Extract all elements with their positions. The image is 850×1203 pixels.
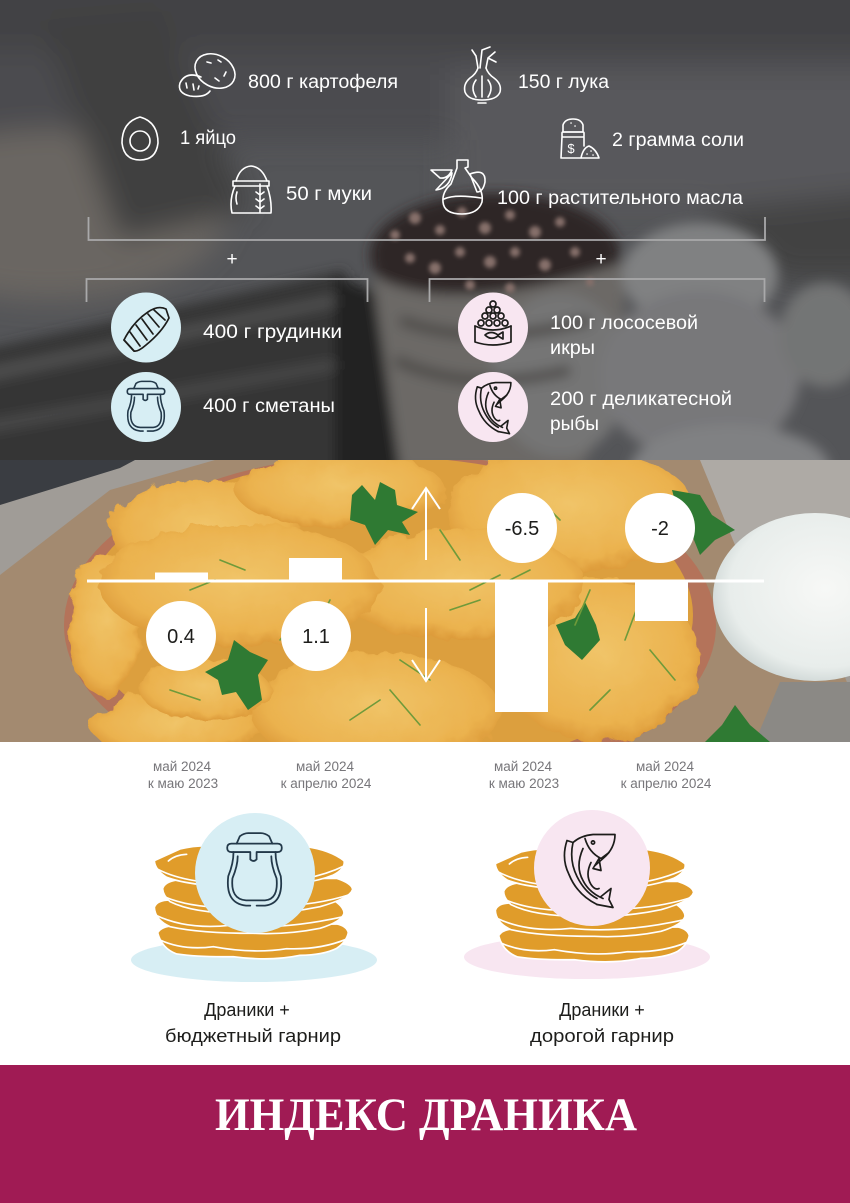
pancakes bbox=[495, 849, 694, 962]
icon: fish bbox=[564, 834, 615, 908]
food photo of potato pancakes bbox=[0, 460, 850, 742]
label: roe amount: икры bbox=[550, 338, 595, 359]
plus: expensive side: + bbox=[595, 249, 607, 270]
value: -6.5: -6.5 bbox=[505, 518, 539, 540]
value: -6.5 bbox=[487, 493, 557, 563]
icon: brisket circle bbox=[111, 292, 181, 362]
bar: -2 bbox=[635, 581, 688, 621]
ingredient: potatoes bbox=[179, 47, 398, 96]
icon: roe circle bbox=[458, 292, 528, 362]
topping: salmon roe bbox=[458, 292, 698, 362]
period label 3: май 2024 bbox=[494, 759, 553, 774]
topping: sour cream bbox=[111, 372, 335, 442]
icon: fish circle bbox=[458, 372, 528, 442]
pancakes bbox=[154, 846, 353, 959]
label: egg amount: 1 яйцо bbox=[180, 128, 236, 149]
icon: fish bbox=[476, 383, 511, 434]
value: 1.1 bbox=[281, 601, 351, 671]
bar: 1.1 bbox=[289, 558, 342, 581]
title band bbox=[0, 1065, 850, 1203]
bracket: budget toppings bbox=[86, 279, 368, 302]
label: roe amount: 100 г лососевой bbox=[550, 313, 698, 334]
bar chart: price index change bbox=[87, 488, 764, 712]
icon: sour cream circle bbox=[111, 372, 181, 442]
icon: flour sack bbox=[231, 166, 271, 213]
period label 2: к апрелю 2024 bbox=[281, 776, 372, 791]
bar: -6.5 bbox=[495, 581, 548, 712]
ingredient: egg bbox=[122, 117, 236, 160]
caption: expensive garnish: дорогой гарнир bbox=[530, 1026, 674, 1046]
arrow: down bbox=[412, 608, 440, 681]
bracket: base ingredients bbox=[88, 217, 765, 240]
icon: potatoes bbox=[179, 47, 241, 96]
value: 1.1: 1.1 bbox=[302, 626, 330, 648]
badge circle bbox=[534, 810, 650, 926]
icon: roe tin bbox=[475, 301, 511, 345]
icon: egg bbox=[122, 117, 158, 160]
period label 2: май 2024 bbox=[296, 759, 355, 774]
ingredient: oil bbox=[431, 160, 743, 214]
label: potatoes amount: 800 г картофеля bbox=[248, 72, 398, 93]
arrow: up bbox=[412, 488, 440, 560]
bracket: expensive toppings bbox=[430, 279, 764, 302]
plate shadow bbox=[131, 938, 377, 982]
caption: expensive garnish: Драники + bbox=[559, 1000, 645, 1020]
label: salt amount: 2 грамма соли bbox=[612, 130, 744, 151]
ingredient: salt bbox=[561, 119, 744, 158]
badge circle bbox=[195, 813, 315, 933]
label: flour amount: 50 г муки bbox=[286, 184, 372, 205]
icon: jar bbox=[227, 833, 282, 906]
label: fish amount: 200 г деликатесной bbox=[550, 389, 732, 410]
value: 0.4 bbox=[146, 601, 216, 671]
value: -2 bbox=[625, 493, 695, 563]
icon: salt shaker bbox=[561, 119, 599, 158]
period labels bbox=[148, 759, 712, 791]
period label 1: к маю 2023 bbox=[148, 776, 218, 791]
period label 3: к маю 2023 bbox=[489, 776, 559, 791]
label: oil amount: 100 г растительного масла bbox=[497, 188, 743, 209]
title: ИНДЕКС ДРАНИКА bbox=[215, 1089, 637, 1141]
caption: budget garnish: бюджетный гарнир bbox=[165, 1026, 341, 1046]
icon: sour cream jar bbox=[127, 381, 165, 431]
icon: oil bottle bbox=[431, 160, 485, 214]
label: onion amount: 150 г лука bbox=[518, 72, 609, 93]
period label 1: май 2024 bbox=[153, 759, 212, 774]
topping: delicatessen fish bbox=[458, 372, 732, 442]
label: sour cream amount: 400 г сметаны bbox=[203, 396, 335, 417]
period label 4: май 2024 bbox=[636, 759, 695, 774]
ingredient: onion bbox=[465, 47, 609, 103]
axis line bbox=[87, 580, 764, 582]
icon lines: brisket bbox=[124, 308, 169, 351]
plus: budget side: + bbox=[226, 249, 238, 270]
icon: salt shaker: $ bbox=[567, 141, 575, 156]
value: 0.4: 0.4 bbox=[167, 626, 195, 648]
bar: 0.4 bbox=[155, 572, 208, 580]
plate shadow bbox=[464, 935, 710, 979]
topping: brisket bbox=[111, 292, 342, 362]
label: brisket amount: 400 г грудинки bbox=[203, 322, 342, 343]
illustration: budget pancake stack bbox=[131, 813, 377, 982]
icon: onion bbox=[465, 47, 500, 103]
illustration: expensive pancake stack bbox=[464, 810, 710, 979]
label: fish amount: рыбы bbox=[550, 414, 599, 435]
ingredient: flour bbox=[231, 166, 372, 213]
darkened photo of potatoes and boards bbox=[0, 0, 850, 460]
value: -2: -2 bbox=[651, 518, 669, 540]
caption: budget garnish: Драники + bbox=[204, 1000, 290, 1020]
period label 4: к апрелю 2024 bbox=[621, 776, 712, 791]
